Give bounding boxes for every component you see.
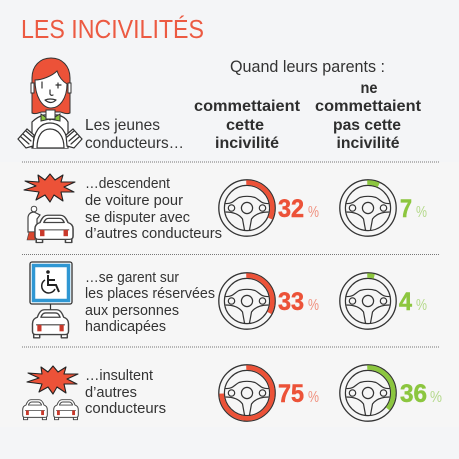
gauge: 33% xyxy=(219,273,319,329)
gauge: 36%: % xyxy=(430,389,442,406)
gauge: 32%: % xyxy=(308,204,319,221)
column heading: commettaient: incivilité xyxy=(215,135,279,152)
gauge: 7%: 7 xyxy=(400,195,412,223)
icon: young woman driver xyxy=(18,58,82,148)
text: row 1: …descendent xyxy=(85,175,171,192)
column heading: commettaient: cette xyxy=(226,117,264,134)
gauge: 32% xyxy=(219,180,319,236)
text: row 1: d’autres conducteurs xyxy=(85,225,222,242)
column heading: ne commettaient pas: pas cette xyxy=(333,117,401,134)
title: LES INCIVILITÉS xyxy=(21,14,204,44)
gauge: 32%: 32 xyxy=(278,195,304,223)
text: row 2: handicapées xyxy=(85,318,166,335)
text: row 1: se disputer avec xyxy=(85,209,190,226)
gauge: 7% xyxy=(340,180,427,236)
gauge: 4% xyxy=(340,273,427,329)
text: row 3: d’autres xyxy=(85,384,137,401)
gauge: 75% xyxy=(219,365,319,421)
text: row 2: aux personnes xyxy=(85,302,179,319)
column heading: commettaient: commettaient xyxy=(194,98,301,115)
text: row 3: conducteurs xyxy=(85,400,166,417)
text: row 3: …insultent xyxy=(85,367,154,384)
text: les jeunes conducteurs: conducteurs… xyxy=(85,135,184,152)
icon: argument between drivers xyxy=(24,174,75,242)
gauge: 7%: % xyxy=(416,204,427,221)
gauge: 4%: 4 xyxy=(399,288,412,316)
text: row 3 xyxy=(85,367,166,417)
text: row 1 xyxy=(85,175,222,242)
column heading: ne commettaient pas: ne xyxy=(360,80,378,97)
gauge: 33%: 33 xyxy=(278,288,304,316)
gauge: 75%: % xyxy=(308,389,319,406)
text: les jeunes conducteurs xyxy=(85,117,184,152)
text: row 1: de voiture pour xyxy=(85,192,183,209)
column heading: ne commettaient pas: commettaient xyxy=(315,98,422,115)
text: les jeunes conducteurs: Les jeunes xyxy=(85,117,160,134)
text: row 2: …se garent sur xyxy=(85,269,179,286)
gauge: 36% xyxy=(340,365,442,421)
gauge: 36%: 36 xyxy=(400,380,427,408)
column heading: ne commettaient pas xyxy=(315,80,422,152)
gauge: 4%: % xyxy=(416,297,427,314)
gauge: 75%: 75 xyxy=(278,380,304,408)
column heading: commettaient xyxy=(194,98,301,152)
column heading: ne commettaient pas: incivilité xyxy=(336,135,400,152)
text: row 2: les places réservées xyxy=(85,285,215,302)
icon: burst above two cars xyxy=(23,366,78,420)
icon: disabled parking sign and car xyxy=(30,262,72,338)
gauge: 33%: % xyxy=(308,297,319,314)
heading: quand leurs parents: Quand leurs parents : xyxy=(230,57,385,76)
text: row 2 xyxy=(85,269,215,335)
